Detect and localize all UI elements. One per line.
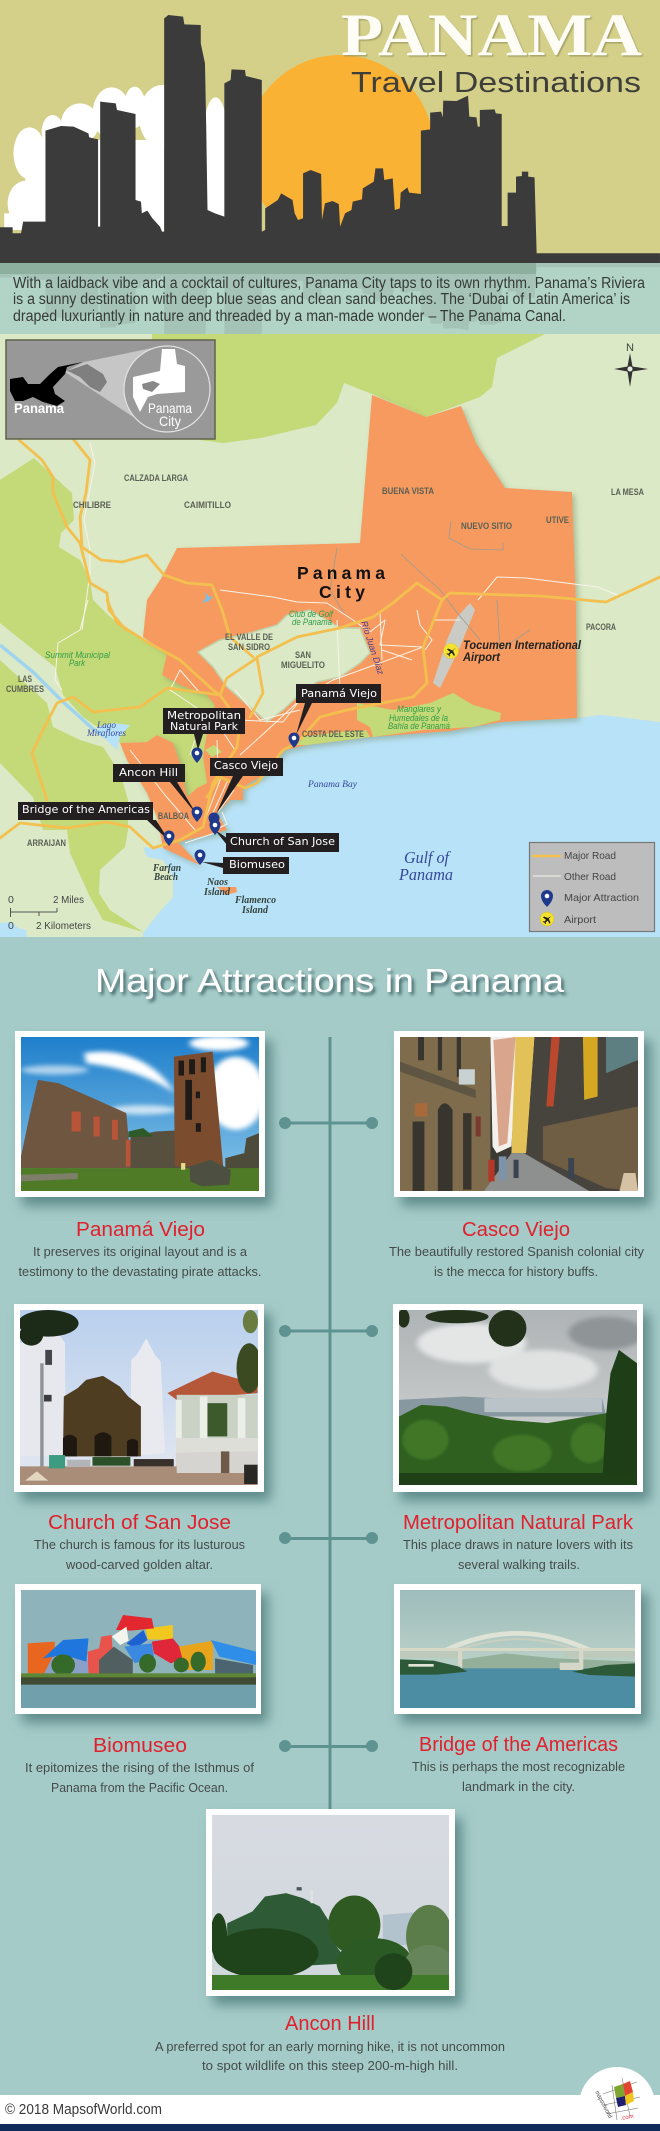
place labels: BUENA VISTA: [382, 486, 434, 496]
locator inset: City: [159, 413, 181, 429]
name: Biomuseo: [93, 1735, 187, 1757]
description: landmark in the city.: [462, 1779, 575, 1794]
label: Panama City: [297, 563, 385, 602]
description: [25, 1760, 254, 1795]
western forest areas: [0, 458, 215, 932]
place labels: LA MESA: [611, 487, 644, 497]
place labels: SAN: [295, 650, 311, 660]
other roads: [55, 443, 622, 843]
place labels: Lago: [96, 720, 117, 730]
description: [18, 1244, 262, 1279]
logo: MapsofWorld: .com: [620, 2114, 634, 2122]
name: Bridge of the Americas: [419, 1734, 618, 1756]
photo: Church of San Jose plaza: [20, 1310, 258, 1485]
card: Bridge of the Americas: [394, 1584, 641, 1794]
Panama silhouette: [10, 362, 83, 406]
place labels: Beach: [153, 872, 178, 883]
callout: Panamá Viejo: Panamá Viejo: [301, 687, 377, 700]
inset labels: Panama: [14, 400, 64, 416]
description: The beautifully restored Spanish colonial city: [389, 1244, 644, 1259]
scale bar: 0: [8, 920, 14, 932]
photo: Metropolitan Natural Park view: [399, 1310, 637, 1485]
place labels: Río Juan Díaz: [359, 620, 386, 676]
label: Panama City: Panama: [297, 563, 385, 583]
place labels: UTIVE: [546, 515, 569, 525]
photo: ruins of Panamá Viejo: [21, 1037, 259, 1191]
description: several walking trails.: [458, 1557, 580, 1572]
description: A preferred spot for an early morning hike, it is not uncommon: [155, 2039, 505, 2054]
card: Biomuseo: [15, 1584, 261, 1795]
callout: Church of San Jose: Church of San Jose: [230, 835, 335, 848]
northern forest: [152, 334, 545, 443]
city skyline silhouette: [0, 15, 660, 264]
callout: Bridge of the Americas: Bridge of the Americas: [22, 803, 150, 816]
place labels: EL VALLE DE: [225, 632, 273, 642]
minor rivers: [330, 521, 530, 650]
card: Ancon Hill: [155, 1809, 505, 2073]
map land background: [0, 334, 660, 937]
major roads: [0, 440, 660, 848]
description: The church is famous for its lusturous: [34, 1537, 245, 1552]
place labels: Flamenco: [234, 895, 276, 906]
place labels: CHILIBRE: [73, 500, 111, 510]
photo: Bridge of the Americas: [400, 1590, 635, 1708]
description: to spot wildlife on this steep 200-m-high hill.: [202, 2058, 458, 2073]
logo: MapsofWorld: mapsofworld: [593, 2090, 613, 2119]
place labels: BALBOA: [158, 811, 189, 821]
city circle: [124, 346, 210, 432]
callout: Church of San Jose: [210, 820, 339, 852]
label: Tocumen International Airport: Airport: [462, 650, 501, 664]
description: is the mecca for history buffs.: [434, 1264, 598, 1279]
canal and lake: [0, 592, 213, 750]
description: Panama from the Pacific Ocean.: [51, 1780, 228, 1795]
place labels: Humedales de la: [389, 713, 448, 723]
zoom wedge: [65, 347, 157, 430]
islands: [217, 887, 237, 895]
place labels: Island: [203, 887, 231, 898]
name: Church of San Jose: [48, 1512, 231, 1534]
description: wood-carved golden altar.: [65, 1557, 213, 1572]
place labels: CALZADA LARGA: [124, 473, 188, 483]
white cloud behind skyline: [4, 85, 227, 232]
label: Tocumen International Airport: Tocumen International: [463, 638, 582, 652]
place labels: NUEVO SITIO: [461, 521, 512, 531]
place labels: Farfan: [152, 863, 181, 874]
intro text: draped luxuriantly in nature and threaded by a man-made wonder – The Panama Canal.: [13, 308, 566, 325]
header banner: [0, 0, 660, 264]
intro text: [13, 275, 645, 325]
place labels: CAIMITILLO: [184, 500, 231, 510]
callout: Casco Viejo: Casco Viejo: [214, 759, 278, 772]
card: Casco Viejo: [389, 1031, 644, 1279]
photo: Ancon Hill: [212, 1815, 449, 1990]
description: [403, 1537, 633, 1572]
place labels: Naos: [206, 877, 228, 888]
callout: Ancon Hill: [113, 764, 202, 822]
description: This is perhaps the most recognizable: [412, 1759, 625, 1774]
timeline: [279, 1037, 378, 1812]
airport runway area: [433, 603, 475, 688]
panel: introduction: [0, 263, 660, 334]
sun: [246, 55, 434, 243]
card: Metropolitan Natural Park: [393, 1304, 644, 1572]
sea: [143, 715, 660, 937]
card: Church of San Jose: [14, 1304, 264, 1572]
photo: Casco Viejo street: [400, 1037, 638, 1191]
compass: [614, 342, 648, 387]
legend: Major Road: [564, 850, 616, 862]
subtitle: Travel Destinations: [351, 67, 641, 99]
description: testimony to the devastating pirate attacks.: [18, 1264, 262, 1279]
legend: Airport: [564, 914, 596, 926]
place labels: Summit Municipal: [45, 650, 111, 660]
place labels: LAS: [18, 674, 32, 684]
footer: [0, 2067, 660, 2131]
callout: Biomuseo: Biomuseo: [229, 858, 285, 871]
name: Ancon Hill: [285, 2013, 375, 2035]
description: [155, 2039, 505, 2073]
legend: Other Road: [564, 871, 616, 883]
eastern Panama region: [67, 364, 107, 392]
place labels: ARRAIJAN: [27, 838, 66, 848]
place labels: de Panamá: [292, 617, 332, 627]
locator inset: Panama: [148, 400, 192, 416]
logo: MapsofWorld: [593, 2078, 640, 2122]
place labels: MIGUELITO: [281, 660, 325, 670]
place labels: Panama Bay: [307, 779, 357, 789]
label: Panama City: City: [319, 582, 365, 602]
callout: Bridge of the Americas: [18, 802, 174, 846]
place labels: Manglares y: [397, 704, 441, 714]
callout: Panamá Viejo: [288, 684, 381, 748]
compass: N: [626, 342, 634, 354]
Panama City outline: [133, 349, 185, 412]
scale bar: [8, 894, 91, 932]
place labels: Miraflores: [86, 728, 127, 738]
title: PANAMA: [341, 2, 642, 68]
place labels: CUMBRES: [6, 684, 44, 694]
place labels: SAN SIDRO: [228, 642, 270, 652]
attractions section background: [0, 937, 660, 2095]
place labels: [6, 473, 644, 916]
name: Casco Viejo: [462, 1219, 570, 1241]
locator inset: [6, 340, 215, 439]
place labels: PACORA: [586, 622, 616, 632]
description: [34, 1537, 245, 1572]
legend: Major Attraction: [564, 892, 639, 904]
scale bar: 2 Kilometers: [36, 920, 91, 932]
description: This place draws in nature lovers with its: [403, 1537, 633, 1552]
description: It preserves its original layout and is a: [33, 1244, 248, 1259]
photo: Biomuseo building: [21, 1590, 256, 1708]
wetland green: [357, 693, 501, 737]
card: Panamá Viejo: [15, 1031, 265, 1279]
callout: Metropolitan Natural Park: [163, 708, 245, 763]
name: Metropolitan Natural Park: [403, 1512, 634, 1534]
copyright: © 2018 MapsofWorld.com: [5, 2102, 162, 2118]
place labels: Bahía de Panamá: [388, 721, 450, 731]
callout: Casco Viejo: [208, 758, 283, 828]
scale bar: 2 Miles: [53, 894, 84, 906]
place labels: Park: [69, 658, 85, 668]
callout: Metropolitan Natural Park: Natural Park: [170, 720, 239, 733]
map of Panama City: [0, 334, 660, 937]
description: [412, 1759, 625, 1794]
place labels: Island: [241, 905, 269, 916]
section heading: Major Attractions in Panama: [95, 962, 565, 999]
place labels: COSTA DEL ESTE: [302, 729, 364, 739]
description: It epitomizes the rising of the Isthmus of: [25, 1760, 254, 1775]
callout: Biomuseo: [194, 850, 289, 874]
place labels: Gulf of: [404, 848, 451, 867]
legend: [530, 842, 654, 932]
name: Panamá Viejo: [76, 1219, 205, 1241]
callout: Ancon Hill: Ancon Hill: [119, 766, 178, 779]
place labels: Club de Golf: [289, 609, 334, 619]
description: [389, 1244, 644, 1279]
Panama City district: [120, 395, 577, 865]
San Miguelito enclave: [198, 610, 370, 722]
scale bar: 0: [8, 894, 14, 906]
label: Tocumen International Airport: [462, 638, 582, 664]
callout: Metropolitan Natural Park: Metropolitan: [167, 709, 241, 722]
place labels: Panama: [398, 865, 453, 884]
icon: airport: [444, 644, 458, 658]
